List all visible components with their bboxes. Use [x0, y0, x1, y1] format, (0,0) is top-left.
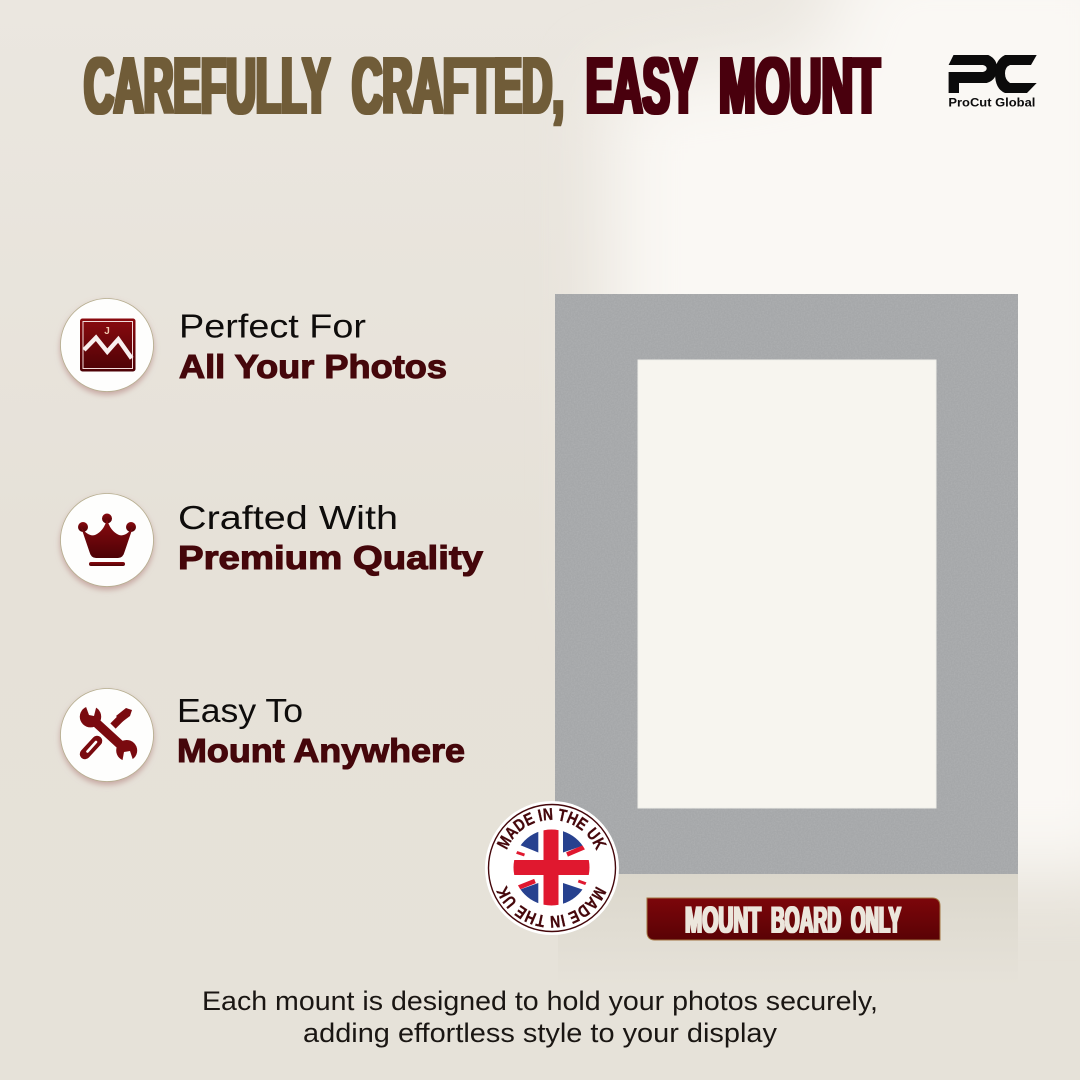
- icon: photo: [60, 298, 154, 392]
- text: easy to: Easy To: [177, 692, 303, 729]
- badge text: MADE IN THE UK: [496, 808, 607, 851]
- title: MOUNT: [719, 41, 880, 130]
- icon: tools: [60, 688, 154, 782]
- badge text: [496, 808, 607, 928]
- feature: crafted with premium quality: [60, 494, 484, 586]
- logo: ProCut Global: ProCut Global: [948, 98, 1035, 110]
- badge text: MADE IN THE UK: [496, 885, 606, 928]
- feature: perfect for all your photos: [60, 298, 447, 392]
- text: crafted with: Crafted With: [178, 499, 398, 536]
- flag: [514, 830, 590, 906]
- caption: adding effortless style to your display: [303, 1018, 778, 1048]
- wrench: [80, 704, 137, 763]
- mount window: [638, 360, 936, 808]
- badge: made in the uk: [485, 801, 619, 935]
- text: mount anywhere: Mount Anywhere: [177, 732, 465, 769]
- title: EASY: [586, 41, 697, 130]
- title: CAREFULLY: [84, 41, 330, 130]
- banner: mount board only: [647, 898, 940, 940]
- banner: mount board only: MOUNT: [685, 900, 761, 940]
- feature: easy to mount anywhere: [60, 688, 465, 782]
- banner: mount board only: ONLY: [851, 900, 901, 940]
- banner: mount board only: BOARD: [771, 900, 841, 940]
- text: all your photos: All Your Photos: [179, 348, 447, 385]
- caption: Each mount is designed to hold your photos securely,: [202, 986, 878, 1016]
- title: CRAFTED,: [352, 41, 564, 130]
- title: [84, 41, 880, 130]
- text: perfect for: Perfect For: [179, 308, 366, 344]
- logo: ProCut Global: [948, 55, 1037, 110]
- icon: photo: J: [104, 326, 110, 337]
- mount board: [555, 294, 1018, 986]
- icon: crown: [60, 494, 154, 586]
- text: premium quality: Premium Quality: [178, 539, 484, 576]
- screwdriver: [85, 708, 132, 754]
- caption: [202, 986, 878, 1048]
